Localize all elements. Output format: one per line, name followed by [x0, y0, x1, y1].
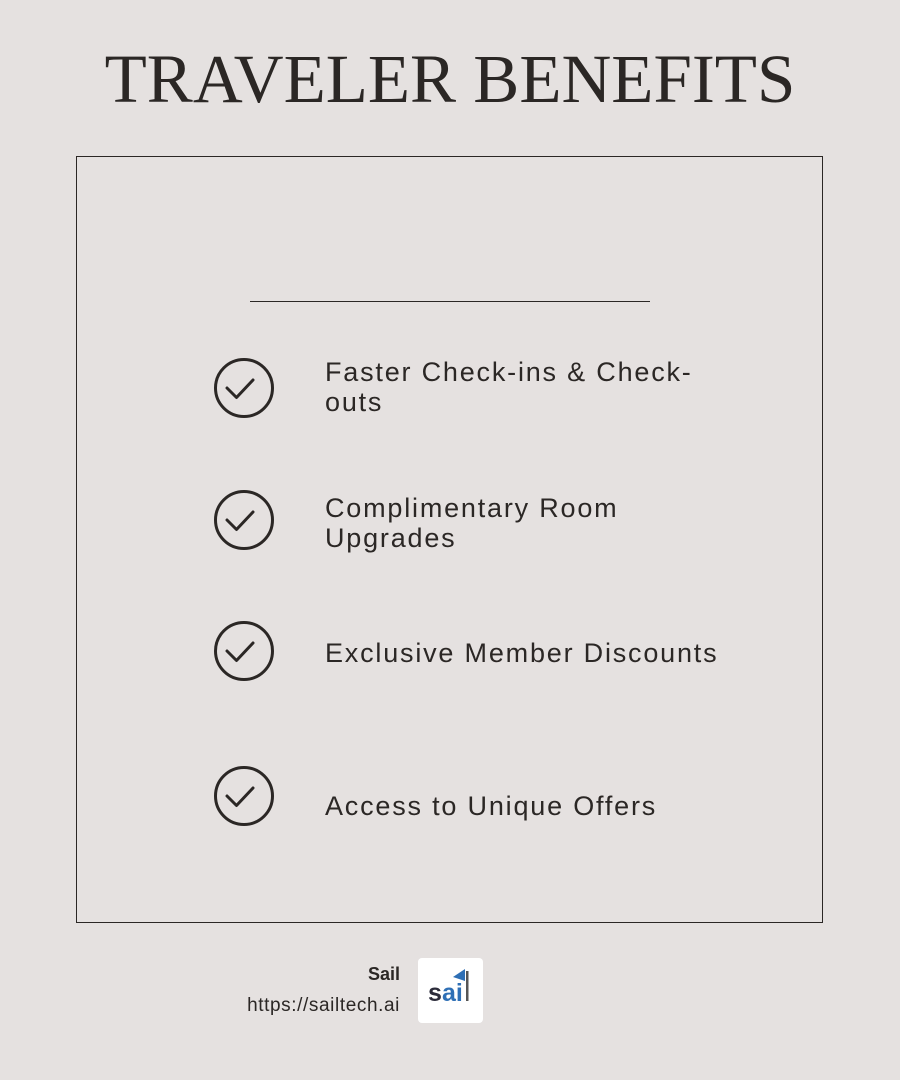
text: outs: [325, 387, 383, 417]
text: Access to Unique Offers: [325, 791, 657, 821]
text: Upgrades: [325, 523, 456, 553]
text: [325, 357, 693, 417]
item: faster check-ins: [214, 357, 693, 418]
text: Faster Check-ins & Check-: [325, 357, 693, 387]
panel: benefits: [76, 156, 823, 923]
logo: s: [428, 979, 442, 1007]
brand name: Sail: [368, 964, 400, 984]
icon: check circle: [214, 490, 274, 550]
text: [325, 493, 618, 553]
icon: check circle: [214, 766, 274, 826]
footer: [247, 958, 483, 1023]
item: room upgrades: [214, 490, 618, 553]
icon: check circle: [214, 621, 274, 681]
item: unique offers: [214, 766, 657, 826]
logo: ai: [442, 979, 463, 1007]
url: https://sailtech.ai: [247, 995, 400, 1016]
item: discounts: [214, 621, 718, 681]
logo: [418, 958, 483, 1023]
title: TRAVELER BENEFITS: [105, 41, 795, 117]
text: Complimentary Room: [325, 493, 618, 523]
icon: check circle: [214, 358, 274, 418]
text: Exclusive Member Discounts: [325, 638, 718, 668]
